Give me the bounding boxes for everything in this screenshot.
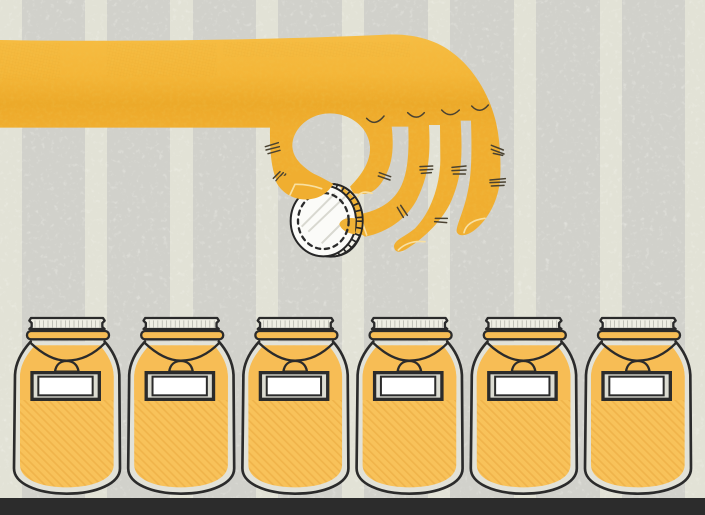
jar 3 (242, 318, 348, 494)
jar 1 (14, 318, 120, 494)
fingernails (357, 192, 485, 250)
jars row (14, 318, 691, 494)
jar 5 (471, 318, 577, 494)
thumb over coin (276, 172, 333, 199)
arm mottling (0, 34, 500, 252)
knuckle creases (265, 105, 505, 223)
middle fingertip behind coin (339, 218, 356, 234)
jar 6 (585, 318, 691, 494)
arm and fingers (0, 34, 500, 252)
arm crosshatch (0, 42, 410, 80)
jar 2 (128, 318, 234, 494)
hand holding coin (0, 34, 505, 257)
jar 4 (357, 318, 463, 494)
shelf (0, 498, 705, 515)
coin (291, 184, 364, 257)
